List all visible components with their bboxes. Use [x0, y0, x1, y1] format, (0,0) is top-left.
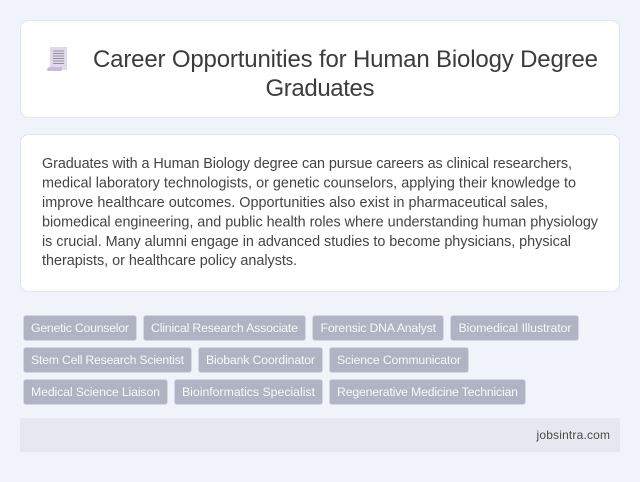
- text block: description paragraph: therapists, or healthcare policy analysts.: [42, 253, 297, 269]
- tag: Biobank Coordinator: Biobank Coordinator: [206, 353, 315, 367]
- title: Career Opportunities for Human Biology Degree: [93, 46, 598, 73]
- footer source label: jobsintra.com: [536, 428, 610, 442]
- tag: Biobank Coordinator: [198, 348, 322, 372]
- tag: Regenerative Medicine Technician: [330, 380, 526, 404]
- tag: Forensic DNA Analyst: [312, 316, 444, 340]
- icon: document scroll: [47, 47, 67, 71]
- title: Graduates: [266, 75, 374, 102]
- tag: Genetic Counselor: [24, 316, 136, 340]
- text block: description paragraph: Graduates with a Human Biology degree can pursue careers as clinical researchers,: [42, 156, 572, 172]
- tag: Biomedical Illustrator: [450, 316, 578, 340]
- text block: description paragraph: [42, 156, 599, 269]
- tag: Stem Cell Research Scientist: [24, 348, 192, 372]
- tag: Genetic Counselor: Genetic Counselor: [31, 321, 129, 335]
- tag: Biomedical Illustrator: Biomedical Illustrator: [458, 321, 572, 335]
- tags: career titles: [24, 316, 578, 404]
- tag: Science Communicator: Science Communicator: [337, 353, 461, 367]
- tag: Forensic DNA Analyst: Forensic DNA Analyst: [320, 321, 437, 335]
- text block: description paragraph: is crucial. Many alumni engage in advanced studies to become physicians, physical: [42, 234, 571, 250]
- tag: Regenerative Medicine Technician: Regenerative Medicine Technician: [337, 385, 518, 399]
- tag: Clinical Research Associate: [144, 316, 306, 340]
- text block: description paragraph: medical laboratory technologists, or genetic counselors, applying their knowledge to: [42, 176, 576, 192]
- tag: Medical Science Liaison: [24, 380, 168, 404]
- footer: [20, 418, 620, 452]
- tag: Bioinformatics Specialist: [174, 380, 322, 404]
- tag: Medical Science Liaison: Medical Science Liaison: [31, 385, 160, 399]
- text block: description paragraph: biomedical engineering, and public health roles where understanding human physiology: [42, 214, 599, 230]
- tag: Clinical Research Associate: Clinical Research Associate: [151, 321, 298, 335]
- panel: description: [20, 134, 620, 292]
- tag: Science Communicator: [330, 348, 468, 372]
- text block: description paragraph: improve healthcare outcomes. Opportunities also exist in pharmaceutical sales,: [42, 195, 548, 211]
- tag: Stem Cell Research Scientist: Stem Cell Research Scientist: [31, 353, 185, 367]
- panel: header: [20, 20, 620, 118]
- title: [93, 46, 598, 102]
- tag: Bioinformatics Specialist: Bioinformatics Specialist: [182, 385, 316, 399]
